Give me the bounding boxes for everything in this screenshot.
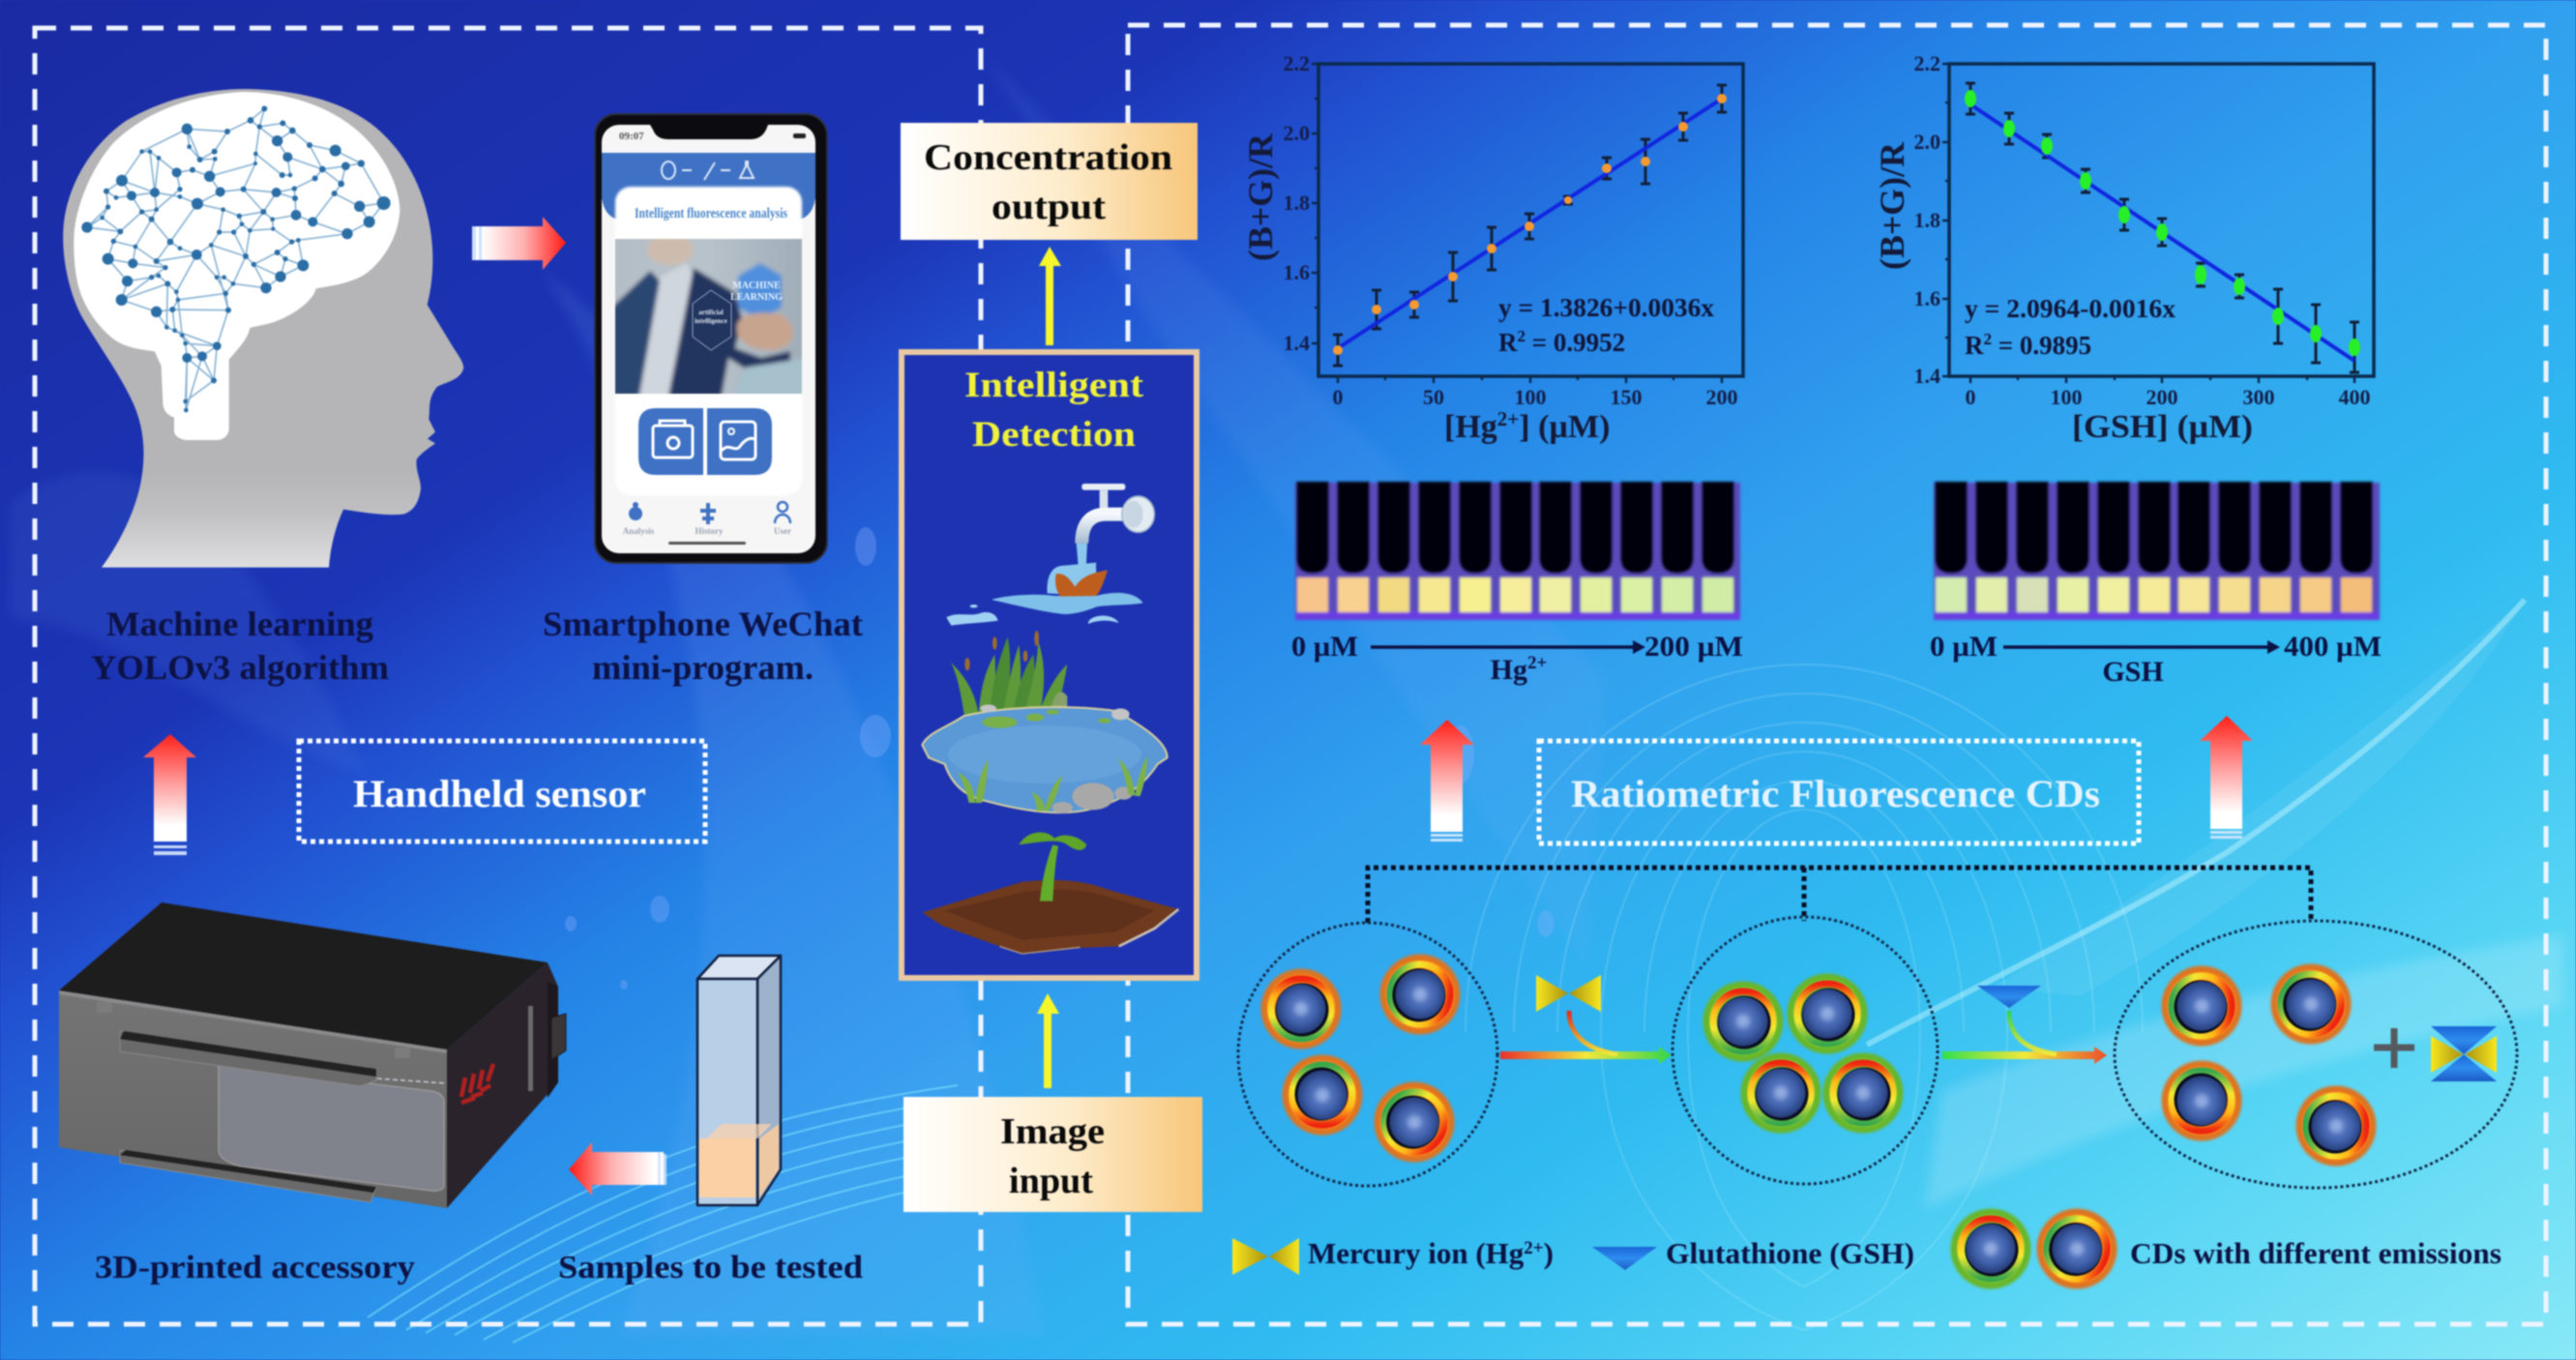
y ticks: 1.6 (1283, 260, 1310, 284)
phone navigation bar (623, 502, 791, 545)
device window (219, 1065, 444, 1191)
x ticks: 300 (2242, 385, 2275, 409)
y axis title: (B+G)/R (1241, 133, 1280, 261)
arrow: input to detection (1037, 993, 1059, 1088)
label: Hg2+ concentration range (1291, 631, 1743, 686)
x axis title: [Hg (1444, 409, 1497, 445)
phone photo: machine learning: intelligence (695, 317, 727, 325)
label: machine learning (91, 605, 389, 687)
icon: 3D-printed accessory (59, 902, 566, 1208)
error bars (1966, 83, 2359, 372)
data points (1965, 90, 2360, 356)
device red LED label (461, 1064, 493, 1103)
label box: ratiometric fluorescence CDs: Ratiometric Fluorescence CDs (1571, 772, 2100, 815)
phone photo: machine learning: artificial (698, 309, 724, 316)
blue header (602, 153, 815, 219)
legend: mercury ion text: Mercury ion (Hg (1308, 1236, 1524, 1270)
x ticks: 100 (2051, 385, 2082, 409)
phone navigation bar: Analysis (623, 526, 655, 536)
y axis title: (B+G)/R (1873, 141, 1911, 270)
icon: sample cuvette (697, 956, 781, 1205)
y ticks: 2.2 (1283, 51, 1310, 75)
y ticks: 1.4 (1283, 331, 1310, 355)
box: concentration output: output (992, 187, 1106, 227)
legend: glutathione icon (1592, 1247, 1657, 1270)
arrow: sample to accessory (569, 1142, 666, 1196)
icon: smartphone WeChat mini-program: 09:07 (619, 131, 644, 142)
phone photo: machine learning: MACHINE (732, 281, 781, 291)
neural network lines (87, 108, 384, 410)
y ticks: 1.8 (1283, 191, 1310, 215)
label: GSH concentration range (1930, 631, 2382, 688)
icon: pond (922, 631, 1168, 813)
box: concentration output (901, 123, 1198, 240)
panel: handheld sensor dashed border (35, 28, 981, 1324)
photo: Hg2+ cuvette series (1295, 482, 1740, 620)
plus sign (2374, 1028, 2414, 1068)
arrow: detection to output (1039, 247, 1061, 345)
equation: 2 (1517, 327, 1525, 345)
phone navigation bar: User (774, 526, 791, 536)
heading: Detection (972, 415, 1136, 455)
legend: mercury ion icon (1232, 1238, 1299, 1275)
arrow: GSH addition (1942, 1011, 2107, 1064)
illustrations (922, 484, 1178, 955)
label: GSH concentration range: GSH (2102, 656, 2164, 688)
label: GSH concentration range: 0 µM (1930, 631, 1998, 663)
icon: glutathione (1977, 986, 2041, 1008)
equation: 2 (1983, 330, 1992, 348)
label: Hg2+ concentration range: 2+ (1527, 653, 1547, 673)
phone card heading: Intelligent fluorescence analysis (635, 206, 787, 222)
legend (1232, 1197, 2502, 1300)
icon: mercury-GSH complex (2431, 1026, 2497, 1081)
legend: mercury ion text: 2+ (1524, 1238, 1544, 1258)
label: smartphone mini-program: mini-program. (592, 648, 814, 687)
heading (964, 366, 1144, 455)
legend: CD particles (1950, 1197, 2128, 1300)
arrow: accessory up to machine learning (143, 734, 196, 855)
label box: handheld sensor (299, 741, 705, 842)
x axis title: ] (µM) (1519, 409, 1610, 445)
x ticks: 200 (1706, 385, 1737, 409)
x ticks (1966, 385, 2370, 409)
fit line (1338, 99, 1722, 348)
box: concentration output: Concentration (924, 137, 1172, 178)
panel: ratiometric fluorescence dashed border (1128, 25, 2546, 1324)
label: smartphone mini-program (543, 605, 863, 687)
x axis title: [GSH] (µM) (2072, 409, 2253, 445)
chart: Hg2+ calibration (1241, 51, 1743, 445)
y ticks: 2.0 (1913, 130, 1940, 154)
equation: = 0.9895 (1992, 331, 2091, 360)
y ticks: 1.8 (1913, 208, 1940, 232)
equation: y = 2.0964-0.0016x (1965, 294, 2176, 323)
icon: mercury ion (1536, 975, 1601, 1012)
box: image input: Image (1000, 1111, 1105, 1152)
arrow: up to GSH photo (2200, 716, 2253, 839)
legend: CD text: CDs with different emissions (2130, 1236, 2502, 1270)
heading: Intelligent (964, 366, 1144, 405)
x ticks: 0 (1333, 385, 1343, 409)
phone photo: machine learning (614, 238, 803, 395)
label: Hg2+ concentration range: 0 µM (1291, 631, 1358, 663)
chart: GSH calibration (1873, 51, 2374, 445)
equation (1965, 294, 2176, 360)
icon: head with neural network brain (63, 89, 463, 568)
x ticks: 50 (1423, 385, 1444, 409)
y ticks (1283, 51, 1310, 355)
icon: tap water (946, 484, 1154, 626)
phone navigation bar: History (695, 526, 724, 536)
fit line (1970, 104, 2354, 361)
device upper slot (120, 1031, 376, 1086)
device lower slot (120, 1150, 376, 1202)
label: machine learning: Machine learning (106, 605, 373, 643)
y ticks: 2.0 (1283, 121, 1310, 145)
x ticks: 100 (1515, 385, 1546, 409)
equation: R (1965, 331, 1983, 360)
label box: ratiometric fluorescence CDs (1539, 741, 2139, 843)
x ticks: 200 (2146, 385, 2178, 409)
icon: smartphone WeChat mini-program (595, 114, 827, 563)
x ticks: 150 (1610, 385, 1643, 409)
label: smartphone mini-program: Smartphone WeChat (543, 605, 863, 643)
error bars (1333, 85, 1727, 366)
phone camera and gallery buttons (638, 408, 772, 475)
photo: GSH cuvette series (1934, 482, 2380, 620)
y ticks: 1.4 (1913, 364, 1940, 388)
stage 2: CDs with mercury (1673, 917, 1938, 1184)
label: samples to be tested: Samples to be tested (558, 1250, 863, 1286)
box: image input: input (1009, 1161, 1093, 1201)
legend: glutathione text: Glutathione (GSH) (1666, 1236, 1914, 1270)
phone photo: machine learning: LEARNING (730, 292, 783, 303)
label box: handheld sensor: Handheld sensor (353, 772, 646, 815)
label: 3D-printed accessory: 3D-printed accessory (95, 1250, 415, 1286)
label: Hg2+ concentration range: Hg (1491, 654, 1527, 686)
bracket: connection to reaction stages (1368, 868, 2311, 923)
data points (1333, 94, 1727, 355)
x axis title: 2+ (1497, 407, 1519, 430)
arrow: up to Hg2+ photo (1420, 720, 1474, 842)
label: Hg2+ concentration range: 200 µM (1644, 631, 1743, 663)
arrow: head to smartphone (472, 217, 566, 270)
header icons (662, 161, 754, 180)
y ticks: 1.6 (1913, 286, 1940, 310)
y ticks: 2.2 (1913, 51, 1940, 75)
stage 3: recovered CDs (2115, 921, 2517, 1188)
equation: R (1498, 328, 1517, 357)
x ticks: 0 (1966, 385, 1975, 409)
box: image input (903, 1097, 1202, 1212)
label: machine learning: YOLOv3 algorithm (91, 648, 389, 687)
stage 1: CDs alone (1238, 923, 1497, 1186)
arrow: Hg2+ addition (1500, 1011, 1672, 1064)
x ticks (1333, 385, 1737, 409)
equation: = 0.9952 (1525, 328, 1625, 357)
label: GSH concentration range: 400 µM (2284, 631, 2382, 663)
x ticks: 400 (2339, 385, 2370, 409)
y ticks (1913, 51, 1940, 388)
equation: y = 1.3826+0.0036x (1498, 293, 1714, 322)
neural network nodes (81, 105, 391, 412)
legend: mercury ion text: ) (1544, 1236, 1554, 1270)
equation (1498, 293, 1714, 357)
icon: soil and seedling (922, 833, 1178, 955)
panel: intelligent detection (902, 352, 1197, 978)
